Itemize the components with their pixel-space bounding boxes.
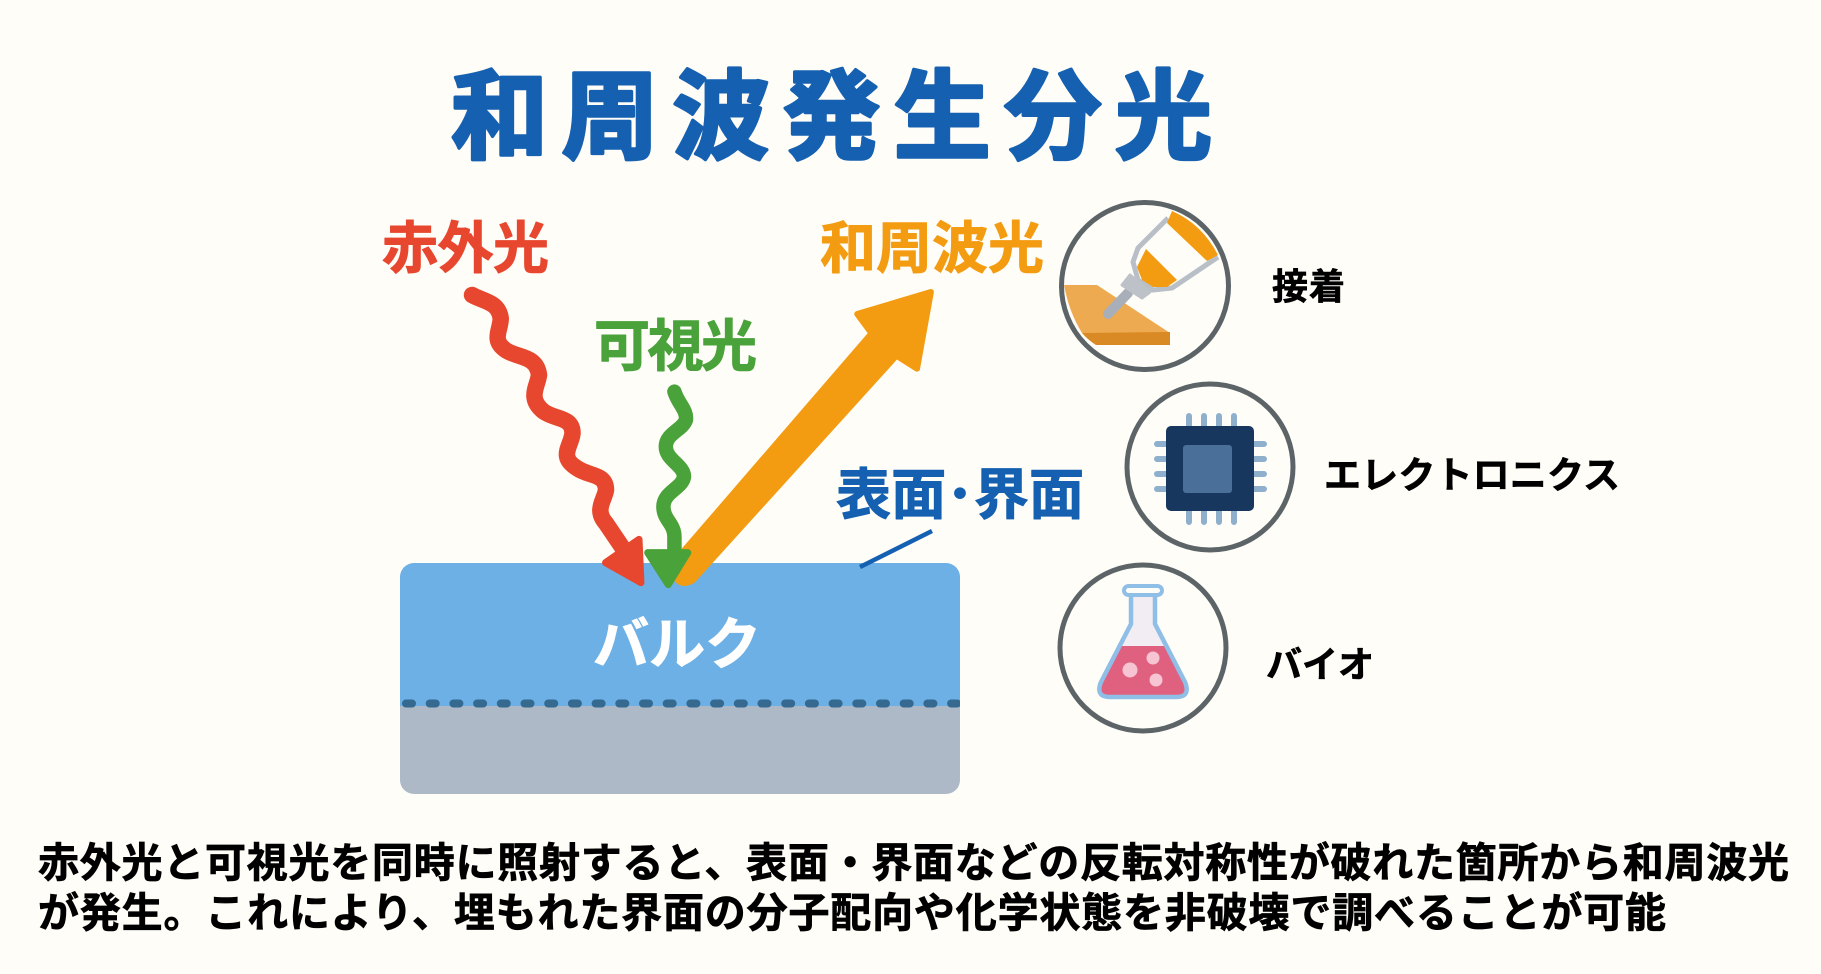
label: bio: バイオ [1266,644,1374,685]
label: sum frequency light: 和周波光 [820,217,1044,280]
description text: が発生。これにより、埋もれた界面の分子配向や化学状態を非破壊で調べることが可能 [38,890,1666,936]
panel: sample block [400,563,960,796]
label: visible light: 可視光 [594,315,757,378]
icon: adhesive [1062,202,1228,370]
surface pointer line [860,531,932,567]
arrow: visible wave [648,392,688,585]
label: bulk: バルク [593,613,761,676]
title: 和周波発生分光 [451,63,1212,172]
arrow: sum frequency output [676,292,931,583]
icon: flask [1060,565,1226,731]
label: adhesive: 接着 [1272,266,1345,307]
arrow: infrared wave [472,295,641,583]
description text [38,840,1789,936]
label: infrared light: 赤外光 [382,217,549,280]
label: surface and interface: 表面･界面 [836,464,1084,526]
label: electronics: エレクトロニクス [1324,455,1620,496]
description text: 赤外光と可視光を同時に照射すると、表面・界面などの反転対称性が破れた箇所から和周波光 [38,840,1789,886]
icon: chip [1127,384,1293,550]
